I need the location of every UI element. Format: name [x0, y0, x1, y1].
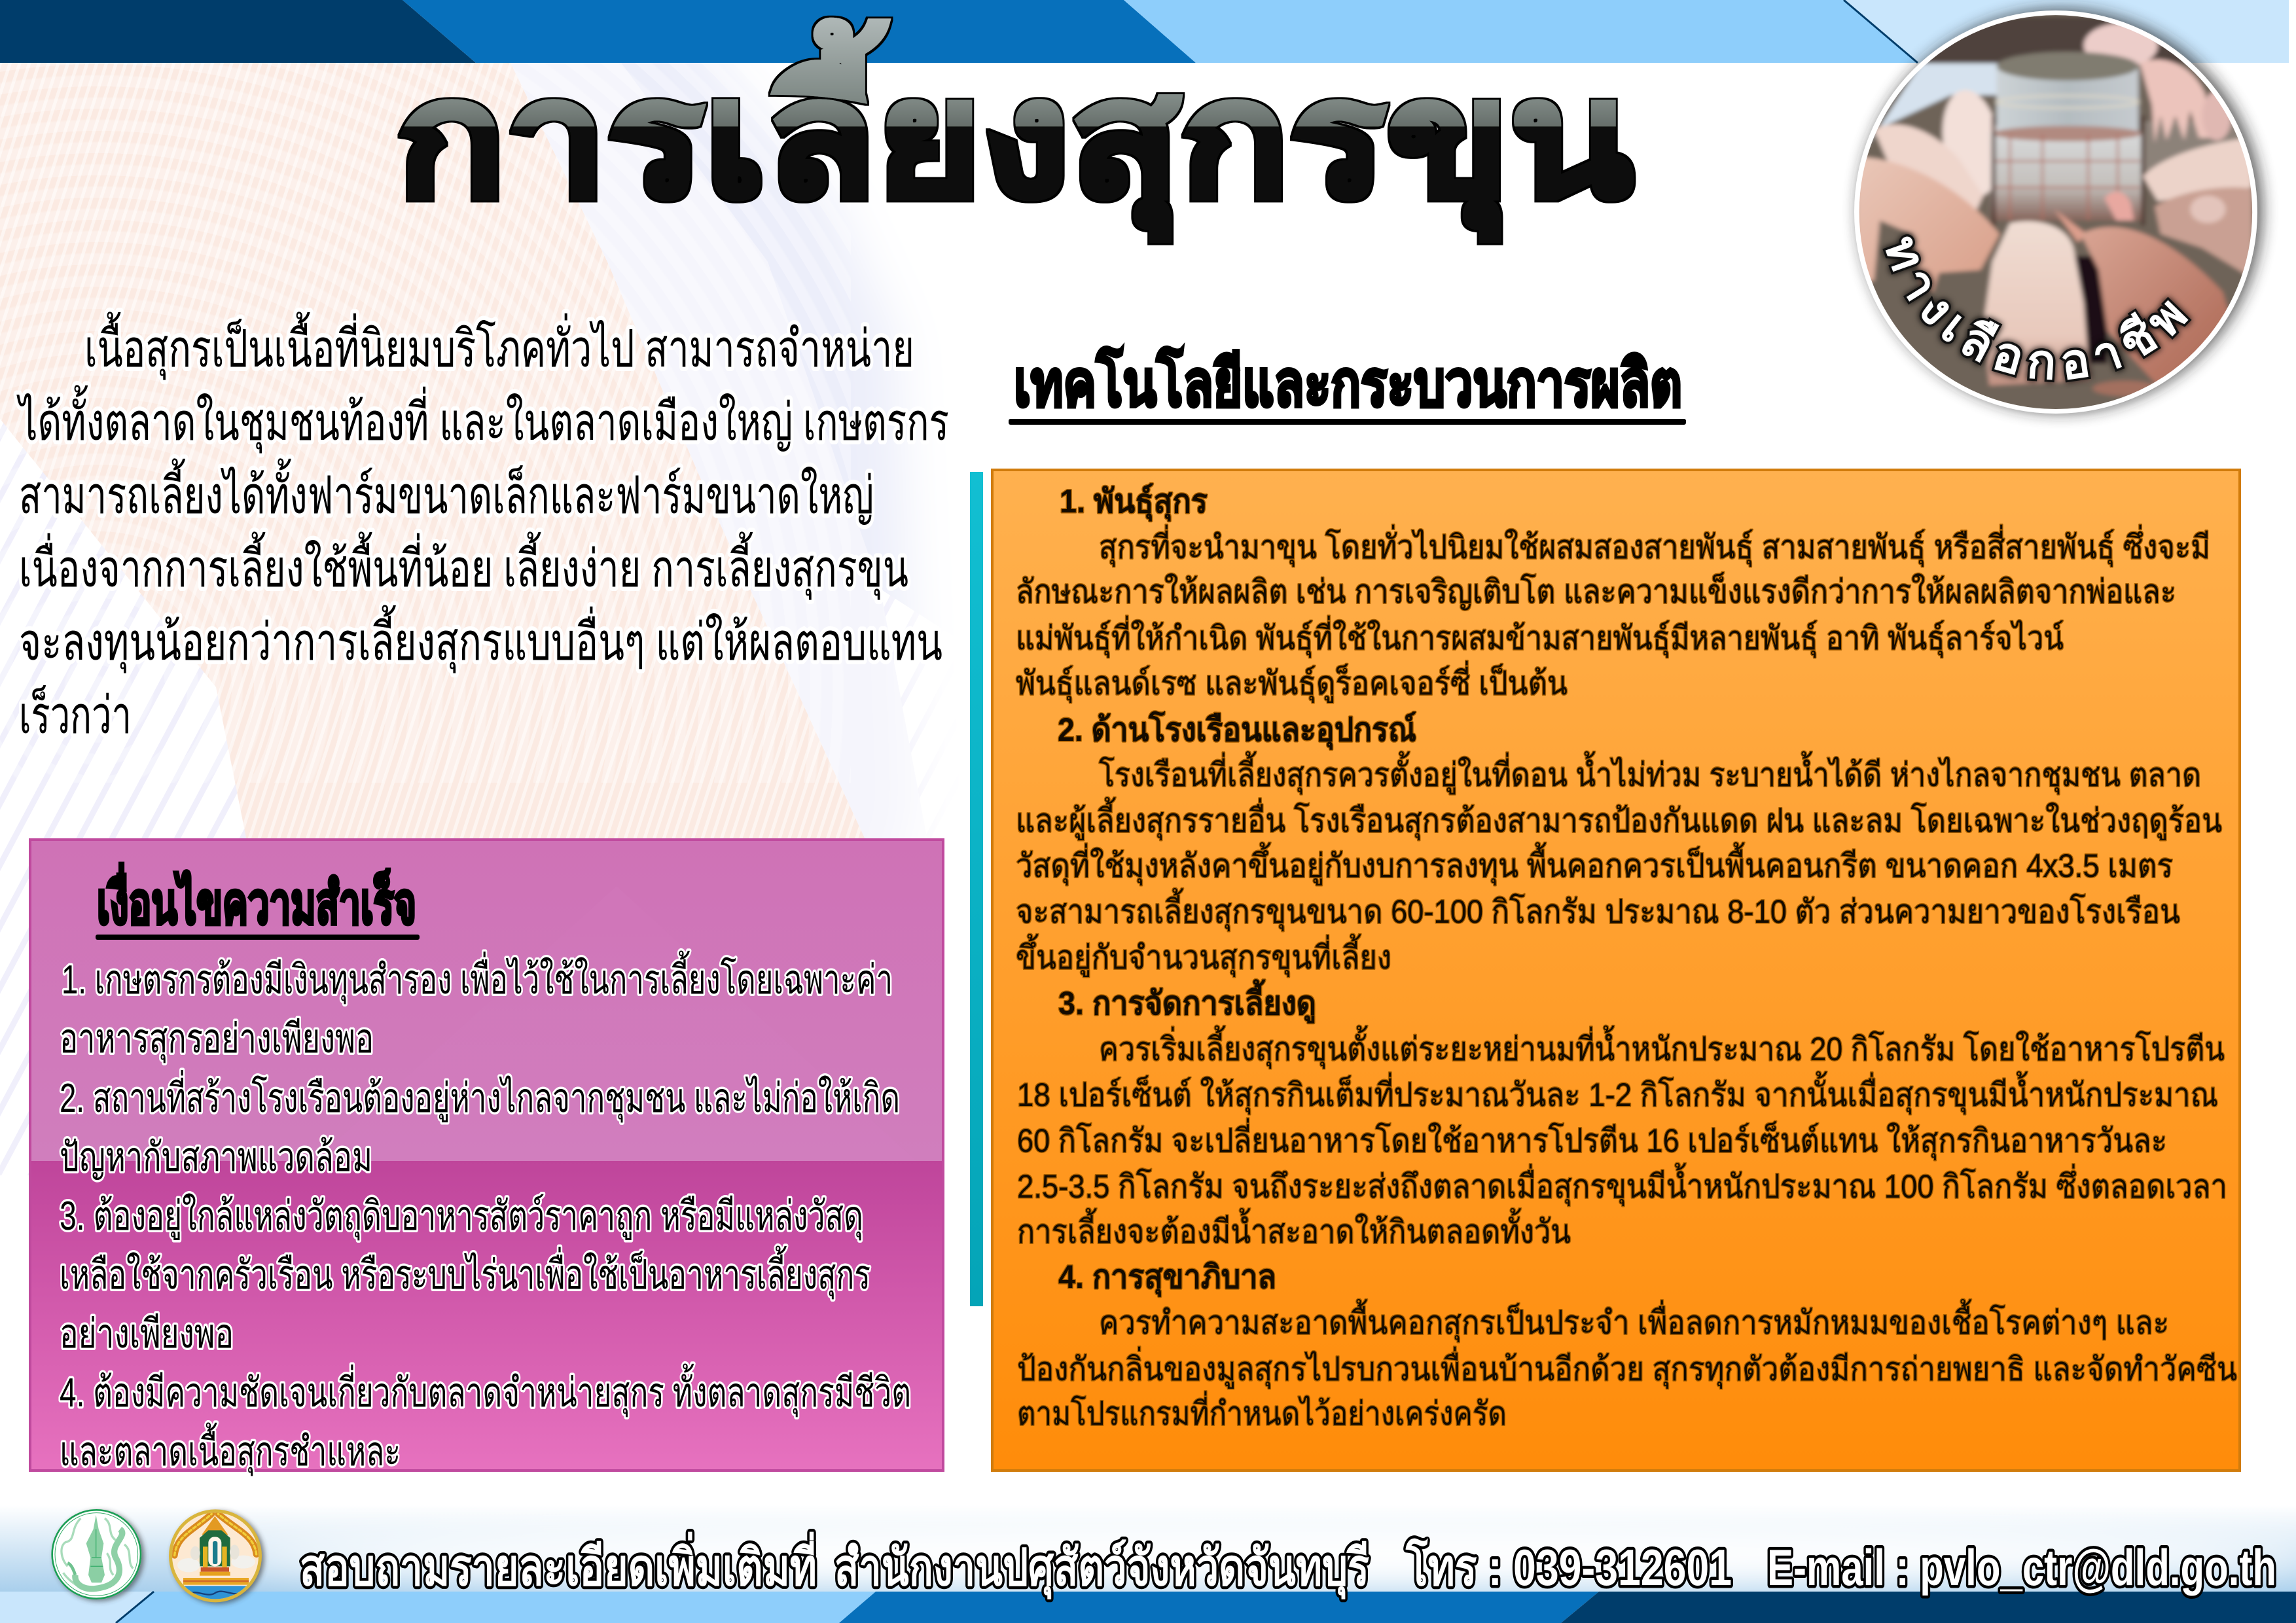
intro paragraph: เนื่องจากการเลี้ยงใช้พื้นที่น้อย เลี้ยงง่าย การเลี้ยงสุกรขุน: [19, 531, 908, 600]
intro paragraph: เร็วกว่า: [19, 685, 132, 744]
panel heading: เงื่อนไขความสำเร็จ: [97, 863, 416, 936]
section 2: housing and equipment: 2. ด้านโรงเรือนและอุปกรณ์: [1058, 710, 1416, 750]
panel heading underline: [96, 935, 420, 940]
intro paragraph: จะลงทุนน้อยกว่าการเลี้ยงสุกรแบบอื่นๆ แต่ให้ผลตอบแทน: [19, 605, 942, 673]
section 1: breeds: แม่พันธุ์ที่ให้กำเนิด พันธุ์ที่ใช้ในการผสมข้ามสายพันธุ์มีหลายพันธุ์ อาทิ พันธุ์ลาร์จไวน์: [1016, 616, 2064, 658]
section 3: feeding management: 18 เปอร์เซ็นต์ ให้สุกรกินเต็มที่ประมาณวันละ 1-2 กิโลกรัม จากนั้นเมื่อสุกรขุนมีน้ำหนักประมาณ: [1017, 1071, 2218, 1115]
section 1: breeds: ลักษณะการให้ผลผลิต เช่น การเจริญเติบโต และความแข็งแรงดีกว่าการให้ผลผลิตจากพ่อและ: [1016, 572, 2176, 610]
intro paragraph: ได้ทั้งตลาดในชุมชนท้องที่ และในตลาดเมืองใหญ่ เกษตรกร: [16, 385, 949, 454]
section 4: sanitation: ควรทำความสะอาดพื้นคอกสุกรเป็นประจำ เพื่อลดการหมักหมมของเชื้อโรคต่างๆ และ: [1099, 1299, 2169, 1342]
section 2: housing and equipment: ขึ้นอยู่กับจำนวนสุกรขุนที่เลี้ยง: [1016, 934, 1391, 977]
conditions list: 3. ต้องอยู่ใกล้แหล่งวัตถุดิบอาหารสัตว์ราคาถูก หรือมีแหล่งวัสดุ: [60, 1193, 863, 1240]
section 2: housing and equipment: โรงเรือนที่เลี้ยงสุกรควรตั้งอยู่ในที่ดอน น้ำไม่ท่วม ระบายน้ำได้ดี ห่างไกลจากชุมชน ตลาด: [1099, 751, 2201, 794]
background pattern: [0, 63, 982, 1178]
conditions list: [60, 950, 911, 1476]
intro paragraph: สามารถเลี้ยงได้ทั้งฟาร์มขนาดเล็กและฟาร์มขนาดใหญ่: [19, 458, 874, 525]
conditions list: อาหารสุกรอย่างเพียงพอ: [60, 1016, 374, 1063]
arched caption: ทางเลือกอาชีพ: [1879, 229, 2195, 386]
section 2: housing and equipment: จะสามารถเลี้ยงสุกรขุนขนาด 60-100 กิโลกรัม ประมาณ 8-10 ตัว ส่วนความยาวของโรงเรือน: [1016, 888, 2180, 931]
top colour band: [0, 0, 2289, 63]
logo: Chanthaburi province seal: [168, 1509, 264, 1604]
section heading underline: [1009, 419, 1686, 425]
section 1: breeds: [1016, 483, 2210, 703]
conditions list: 4. ต้องมีความชัดเจนเกี่ยวกับตลาดจำหน่ายสุกร ทั้งตลาดสุกรมีชีวิต: [60, 1363, 911, 1417]
section heading: technology and production: เทคโนโลยีและกระบวนการผลิต: [1014, 347, 1682, 419]
section 4: sanitation: 4. การสุขาภิบาล: [1058, 1258, 1276, 1297]
section 3: feeding management: 3. การจัดการเลี้ยงดู: [1058, 979, 1316, 1024]
footer contact line: สำนักงานปศุสัตว์จังหวัดจันทบุรี: [834, 1539, 1369, 1599]
section 3: feeding management: การเลี้ยงจะต้องมีน้ำสะอาดให้กินตลอดทั้งวัน: [1017, 1208, 1571, 1250]
logo: Department of Livestock Development seal: [51, 1509, 144, 1601]
photo: pigs at feeder with arched caption: [1846, 0, 2274, 425]
arched caption path: [1885, 243, 2227, 379]
photo shadow: [1859, 9, 2262, 412]
pig photo: [1859, 15, 2253, 409]
conditions list: 2. สถานที่สร้างโรงเรือนต้องอยู่ห่างไกลจากชุมชน และไม่ก่อให้เกิด: [60, 1070, 900, 1122]
photo white border: [1854, 10, 2257, 414]
section 1: breeds: สุกรที่จะนำมาขุน โดยทั่วไปนิยมใช้ผสมสองสายพันธุ์ สามสายพันธุ์ หรือสี่สายพันธุ์ ซึ่งจะมี: [1099, 525, 2210, 567]
section 4: sanitation: ตามโปรแกรมที่กำหนดไว้อย่างเคร่งครัด: [1017, 1391, 1507, 1432]
teal accent bar: [970, 472, 983, 1306]
section 1: breeds: พันธุ์แลนด์เรซ และพันธุ์ดูร็อคเจอร์ซี่ เป็นต้น: [1016, 661, 1568, 703]
conditions list: เหลือใช้จากครัวเรือน หรือระบบไร่นาเพื่อใช้เป็นอาหารเลี้ยงสุกร: [60, 1245, 870, 1299]
footer contact line: สอบถามรายละเอียดเพิ่มเติมที่: [300, 1531, 817, 1596]
section 4: sanitation: [1017, 1258, 2237, 1432]
footer contact line: โทร : 039-312601: [1405, 1537, 1732, 1596]
conditions list: 1. เกษตรกรต้องมีเงินทุนสำรอง เพื่อไว้ใช้ในการเลี้ยงโดยเฉพาะค่า: [62, 950, 893, 1004]
panel: success conditions: [29, 838, 944, 1476]
section 1: breeds: 1. พันธุ์สุกร: [1060, 483, 1208, 522]
footer contact line: [300, 1531, 2276, 1599]
section 3: feeding management: 60 กิโลกรัม จะเปลี่ยนอาหารโดยใช้อาหารโปรตีน 16 เปอร์เซ็นต์แทน ให้สุกรกินอาหารวันละ: [1017, 1118, 2167, 1160]
footer glow background: [0, 1505, 2296, 1592]
intro paragraph: เนื้อสุกรเป็นเนื้อที่นิยมบริโภคทั่วไป สามารถจำหน่าย: [84, 312, 914, 380]
section 3: feeding management: [1017, 979, 2227, 1250]
intro paragraph: [16, 312, 949, 744]
panel background: [29, 838, 944, 1472]
panel: technology details: [992, 470, 2240, 1471]
panel background: [992, 470, 2240, 1471]
bottom colour band: [0, 1592, 2296, 1623]
conditions list: ปัญหากับสภาพแวดล้อม: [60, 1135, 372, 1180]
section 2: housing and equipment: วัสดุที่ใช้มุงหลังคาขึ้นอยู่กับงบการลงทุน พื้นคอกควรเป็นพื้นคอนกรีต ขนาดคอก 4x3.5 เมตร: [1016, 842, 2173, 885]
conditions list: และตลาดเนื้อสุกรชำแหละ: [60, 1422, 401, 1476]
conditions list: อย่างเพียงพอ: [60, 1311, 234, 1357]
title: การเลี้ยงสุกรขุน: [397, 20, 1633, 241]
section 2: housing and equipment: [1016, 710, 2222, 977]
